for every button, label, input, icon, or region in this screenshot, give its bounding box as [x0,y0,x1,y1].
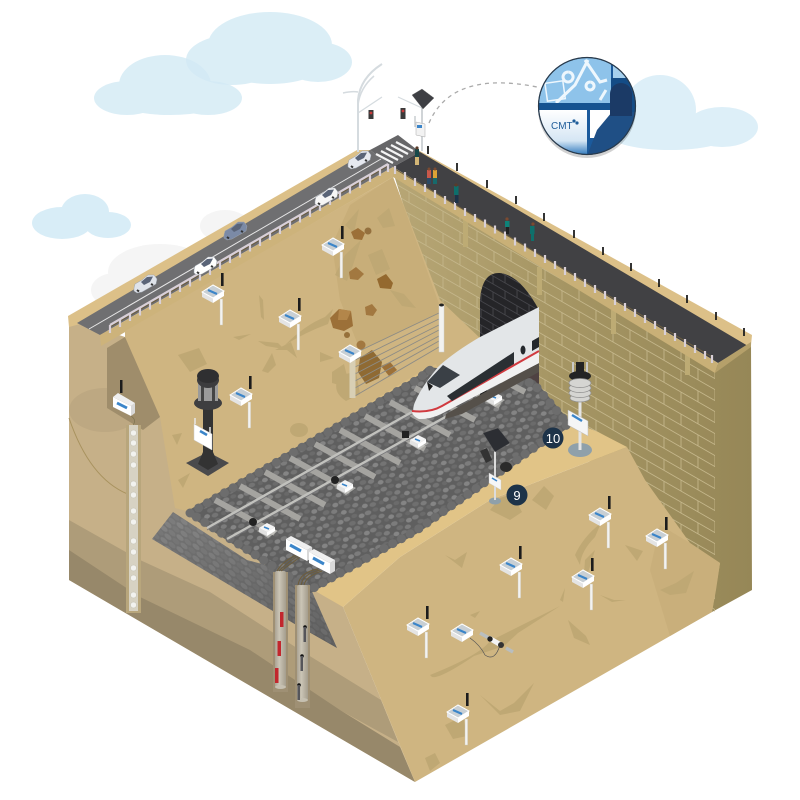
borehole tube with black sensors [295,585,310,708]
dotted connection arc [429,83,537,123]
badge 10: 10 [546,431,560,446]
ballast bed [190,370,568,590]
pedestrian crossing [370,135,420,167]
left slope [107,177,482,515]
badge 9 [506,484,528,506]
sensor nodes on front slope [407,496,668,745]
bollards along walkway [428,146,744,336]
lower tan kerbs [100,167,751,373]
sensor nodes on left slope [202,226,344,428]
borehole tube with red sensors [273,571,288,692]
stone embankment [152,512,337,648]
train [412,307,539,419]
cars on road [134,151,371,293]
tunnel opening [480,273,539,395]
borehole logger boxes [286,536,335,574]
traffic light left [368,110,374,119]
railway tracks [207,368,533,541]
badge 10 [542,428,564,448]
circular inset: control room: CMT [551,121,573,132]
traffic light right [398,97,422,119]
circular inset: control room [537,56,637,158]
inclinometer: left box [113,380,135,425]
railway sleepers [215,360,525,533]
cloud: top large [186,12,352,85]
solar gateway station [412,89,434,151]
street lamp [343,64,382,152]
fence with wires [339,304,444,398]
borehole cables [277,555,322,585]
weather station 10 [568,362,592,457]
slope cracks and shading [172,208,416,488]
guard rail along road [110,164,388,333]
front slope cracks [425,486,694,771]
rocks and boulders [330,228,397,384]
badge 9: 9 [513,488,521,503]
right wall with bricks [393,172,752,612]
cloud: small left [32,194,131,239]
rail sensors [249,389,505,538]
cloud: behind circle [610,75,758,150]
inclinometer: vertical tube with beads [126,425,141,613]
solar logger station 9 [480,428,512,504]
monitoring tower [186,369,229,476]
top surface: upper tan strips [68,150,752,348]
cloud: faint grey behind road [91,210,250,307]
crack sensor with cable [451,624,513,657]
road [77,150,393,335]
asphalt walkway [393,152,748,363]
bright strip beside ballast [310,420,627,607]
pedestrians [415,146,535,241]
front slope [343,447,720,782]
cloud: left large [94,55,242,115]
guard rail along walkway [395,166,712,363]
left face with strata [69,318,415,782]
